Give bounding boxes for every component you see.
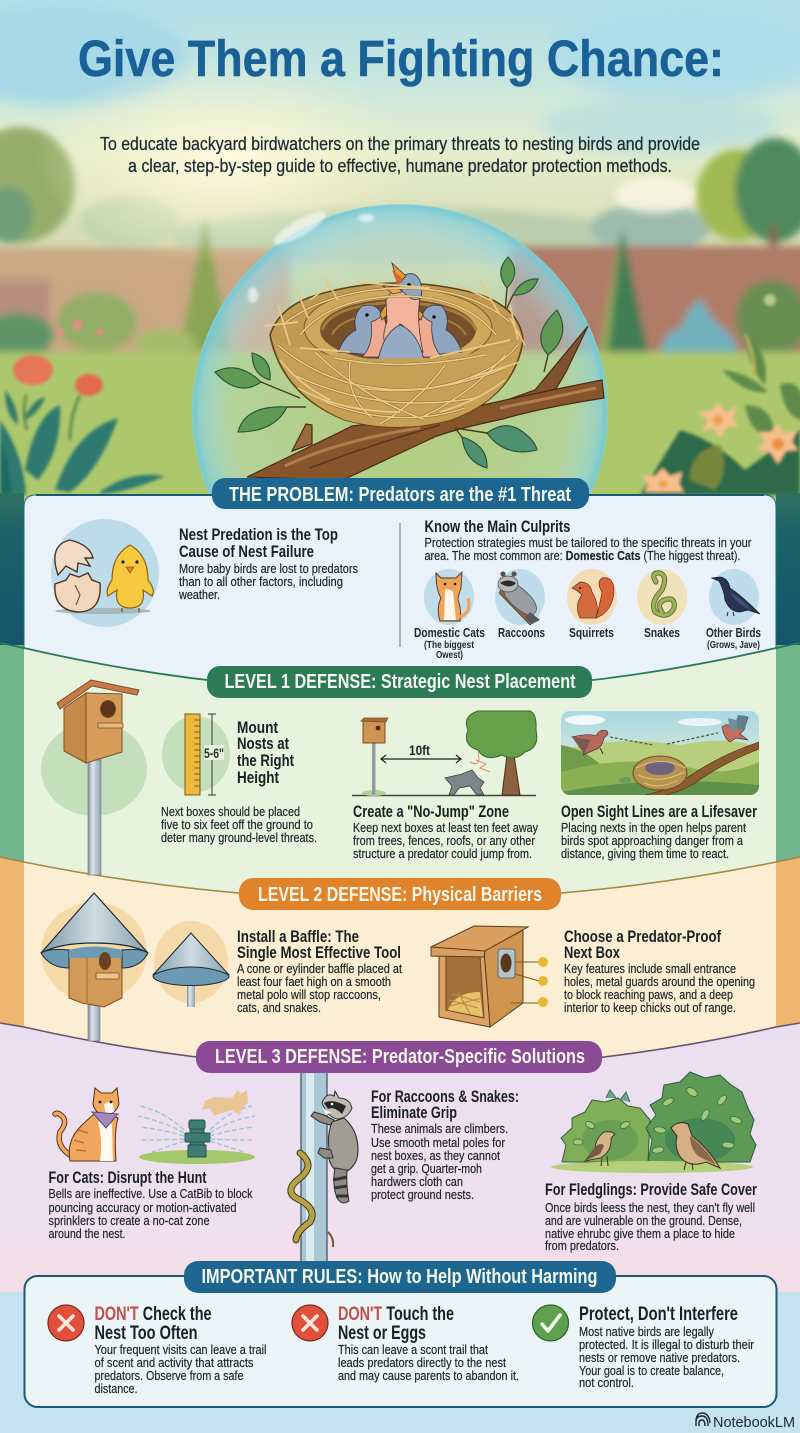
problem left content [51,519,358,627]
rule: don't check: Nest Too Often [94,1323,198,1344]
rule: protect [532,1304,754,1390]
level 1 panel [24,640,776,900]
text: cats: around the nest. [48,1227,126,1241]
text: nest predation: Cause of Nest Failure [179,543,314,561]
culprit labels: Domestic Cats [414,626,485,640]
text: no-jump zone: Keep next boxes at least ten feet away [353,821,539,835]
pill: level 2 [239,878,561,910]
pill: level 3: LEVEL 3 DEFENSE: Predator-Specific Solutions [215,1046,585,1068]
rule: don't check: of scent and activity that attracts [94,1356,254,1370]
text: mount nests: the Right [237,752,294,770]
icon: green check [532,1305,568,1341]
text: raccoons and snakes: get a grip. Quarter-moh [371,1162,482,1176]
icon: raccoon and snake on pole [291,1091,358,1247]
text: baffle [237,928,402,1015]
level 1: no-jump zone [352,711,539,861]
pill: level 1: LEVEL 1 DEFENSE: Strategic Nest Placement [224,671,576,693]
icon: birdhouse on pole [41,680,147,875]
culprit labels: (Grows, Jave) [707,640,760,651]
text: fledglings: Once birds leess the nest, they can't fly well [545,1201,755,1215]
icon: squirrel [567,569,617,625]
text: nest predation [178,526,358,602]
text: raccoons and snakes: hardwers cloth can [371,1175,463,1189]
text: nest predation: More baby birds are lost to predators [179,562,358,576]
rule: don't check: DON'T Check the [94,1304,212,1325]
text: sight lines: distance, giving them time to react. [561,847,729,861]
nest body [270,283,523,427]
subtitle: To educate backyard birdwatchers on the primary threats to nesting birds and provide [100,134,700,154]
pill: level 1 [207,666,592,698]
text: no-jump zone: from trees, fences, roofs, or any other [353,834,535,848]
rule: protect: nests or remove native predators. [579,1351,740,1365]
culprit labels: Other Birds [706,626,761,640]
rule: don't touch: This can leave a scont trail that [338,1343,488,1357]
culprit labels [414,626,761,661]
icon: red cross [292,1305,328,1341]
text: sight lines: Placing nexts in the open helps parent [561,821,746,835]
text: cats: Bells are ineffective. Use a CatBib to block [48,1187,253,1201]
rule: don't check [48,1304,266,1396]
rule: don't touch: leads predators directly to the nest [338,1356,506,1370]
text: mount nests: deter many ground-level threats. [161,831,317,845]
pill: important rules: IMPORTANT RULES: How to Help Without Harming [202,1266,598,1288]
rule: don't touch [292,1304,519,1383]
text: mount nests: Next boxes should be placed [161,805,300,819]
text: mount nests [161,719,317,845]
text: predator-proof box: Key features include small entrance [564,962,736,976]
text: raccoons and snakes: These animals are climbers. [371,1122,508,1136]
problem panel [24,495,776,692]
text: predator-proof box: holes, metal guards around the opening [564,975,755,989]
level 1 side bands [0,643,800,900]
level 3: raccoons and snakes [291,1088,519,1247]
problem side bands [0,493,800,645]
icon: fledglings in shrubs [551,1072,756,1173]
illustration: 10ft gap between box and tree: 10ft [409,742,430,758]
text: nest predation: Nest Predation is the Top [179,526,338,544]
text: no-jump zone: Create a "No-Jump" Zone [353,803,509,821]
text: fledglings: native ehrubc give them a place to hide [545,1227,735,1241]
text: baffle: metal polo will stop raccoons, [237,988,381,1002]
text: nest predation: weather. [178,588,220,602]
rule: don't touch: DON'T Touch the [338,1304,454,1325]
culprit labels: Snakes [644,626,680,640]
level 1: mount nests [41,680,317,875]
icon: ruler with 5-6 feet height: 5-6" [204,745,224,761]
text: baffle: cats, and snakes. [237,1001,321,1015]
icon: snake [637,569,687,625]
panel: important rules [24,1276,776,1407]
text: no-jump zone: structure a predator could jump from. [353,847,532,861]
text: no-jump zone [353,803,539,861]
hero: nest inside glass dome [193,205,607,619]
text: baffle: Single Most Effective Tool [237,944,401,962]
text: nest predation: than to all other factors, including [179,575,343,589]
text: cats [48,1169,253,1241]
text: mount nests: Height [237,769,279,787]
illustration: cutaway nest box with callouts [431,926,548,1027]
level 3: cats [48,1088,255,1241]
text: mount nests: Nosts at [237,735,289,753]
icon: domestic cat [424,569,474,625]
nest front and strands [274,340,521,427]
problem right content [414,518,761,661]
text: raccoons and snakes: nest boxes, as they cannot [371,1149,500,1163]
text: mount nests: five to six feet off the ground to [161,818,313,832]
text: cats: For Cats: Disrupt the Hunt [48,1169,207,1187]
NotebookLM logo: NotebookLM [713,1415,795,1431]
rule: protect: Your goal is to create balance, [579,1364,724,1378]
rule: don't check: Your frequent visits can leave a trail [94,1343,266,1357]
rule: protect: protected. It is illegal to disturb their [579,1338,754,1352]
footer background [0,1292,800,1433]
text: raccoons and snakes: For Raccoons & Snakes: [371,1088,519,1106]
level 3 background [0,1015,800,1293]
text: sight lines [561,803,757,861]
icon: red cross [48,1305,84,1341]
icon: ruler with 5-6 feet height [162,714,230,795]
illustration: parent birds watching the nest [561,711,759,797]
level 2: baffle [41,893,402,1041]
chicks [338,263,462,360]
text: baffle: A cone or eylinder baffle placed at [237,962,402,976]
illustration: 10ft gap between box and tree [352,711,537,796]
title: Give Them a Fighting Chance: [78,30,724,87]
rule: don't touch: Nest or Eggs [338,1323,426,1344]
text: cats: pouncing accuracy or motion-activated [48,1201,236,1215]
pill: the problem [212,478,589,509]
icon: motion-activated sprinkler [138,1090,255,1164]
text: predator-proof box: to block reaching paws, and a deep [564,988,733,1002]
pill: level 3 [196,1041,602,1073]
text: fledglings: from predators. [545,1239,619,1253]
level 1: open sight lines [561,711,759,861]
icon: hatched egg and chick [51,519,159,627]
text: cats: sprinklers to create a no-cat zone [48,1214,210,1228]
text: raccoons and snakes: Eliminate Grip [371,1104,457,1122]
text: culprits: Protection strategies must be tailored to the specific threats in your [424,536,752,550]
level 2 panel [24,850,776,1070]
text: predator-proof box: Choose a Predator-Proof [564,928,721,946]
branch [247,326,604,480]
text: raccoons and snakes: Use smooth metal poles for [371,1136,505,1150]
icon: raccoon [495,569,545,625]
text: sight lines: birds spot approaching danger from a [561,834,743,848]
text: culprits: area. The most common are: Domestic Cats (The higgest threat). [424,549,740,563]
text: raccoons and snakes [371,1088,519,1202]
text: predator-proof box: Next Box [564,944,621,962]
text: culprits [424,518,752,563]
text: predator-proof box: interior to keep chicks out of range. [564,1001,736,1015]
rule: don't check: predators. Observe from a safe [94,1369,244,1383]
culprit labels: Raccoons [498,626,545,640]
text: baffle: least four faet high on a smooth [237,975,391,989]
icon: birdhouse with cone baffle [41,893,148,1041]
rule: protect: Protect, Don't Interfere [579,1304,738,1325]
pill: level 2: LEVEL 2 DEFENSE: Physical Barriers [258,884,542,906]
text: mount nests: Mount [237,719,278,737]
culprit labels: Owest) [436,650,463,661]
level 3: smooth metal pole [301,1072,327,1264]
text: fledglings: and are vulnerable on the ground. Dense, [545,1214,742,1228]
level 2: predator-proof box [431,926,755,1027]
icon: other bird [709,569,760,625]
text: fledglings [545,1181,757,1253]
level 3: fledglings [545,1072,757,1253]
hero garden background [0,0,800,502]
pill: important rules [184,1261,616,1293]
rule: protect: not control. [579,1376,634,1390]
text: predator-proof box [564,928,755,1015]
rule: protect: Most native birds are legally [579,1325,715,1339]
culprit labels: Squirrets [569,626,614,640]
culprit labels: (The biggest [424,640,475,651]
subtitle: a clear, step-by-step guide to effective, humane predator protection methods. [128,156,672,176]
level 2 side bands [0,855,800,1070]
leaves [215,257,563,468]
pill: the problem: THE PROBLEM: Predators are the #1 Threat [229,484,571,506]
text: culprits: Know the Main Culprits [424,518,570,536]
icon: cat with bib [55,1088,119,1161]
rule: don't check: distance. [94,1382,138,1396]
subtitle [100,134,700,176]
text: raccoons and snakes: protect ground nests. [371,1188,474,1202]
icon: cone baffle [153,921,229,1007]
rule: don't touch: and may cause parents to abandon it. [338,1369,519,1383]
text: baffle: Install a Baffle: The [237,928,359,946]
